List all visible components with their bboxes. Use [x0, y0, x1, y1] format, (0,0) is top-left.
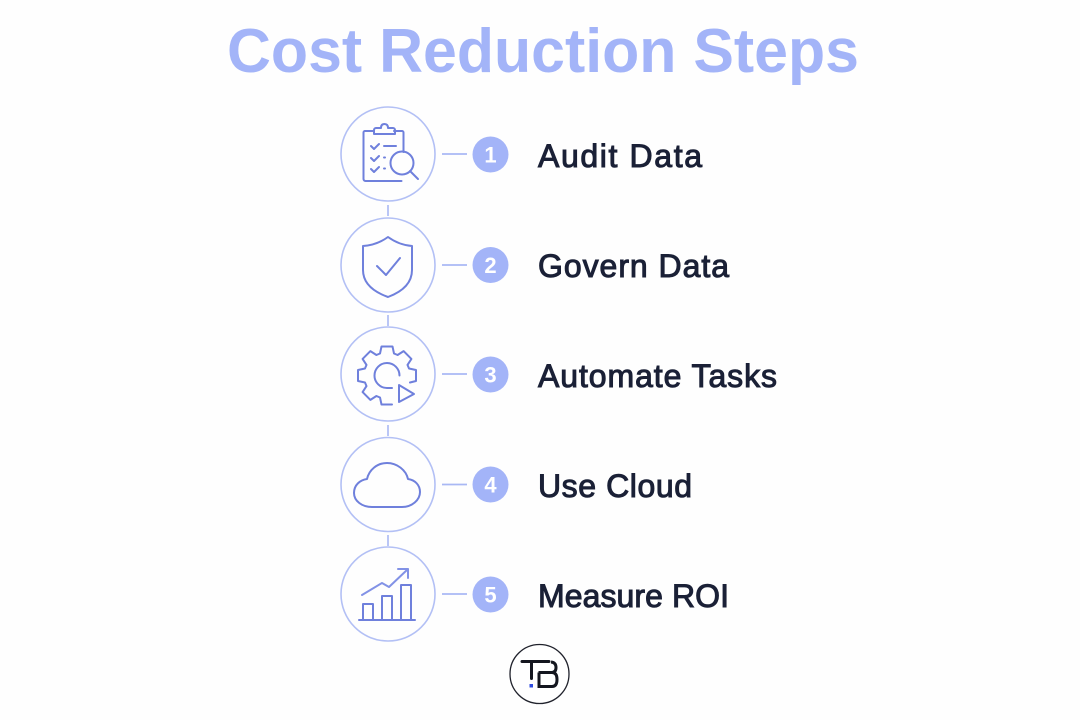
connector [442, 484, 467, 486]
connector [442, 593, 467, 595]
logo: TB [510, 644, 569, 704]
title: Cost Reduction Steps [227, 17, 859, 86]
number badge 4 [472, 466, 508, 502]
icon: clipboard with magnifier [341, 107, 435, 201]
step 4: use cloud [341, 438, 692, 532]
number badge 5: 5 [484, 582, 497, 608]
connector: 3 to 4 [387, 425, 389, 436]
number badge 2: 2 [484, 253, 497, 278]
number badge 4: 4 [484, 472, 497, 498]
label: Audit Data [538, 138, 702, 174]
label: Measure ROI [538, 578, 729, 614]
connector: 1 to 2 [387, 205, 389, 216]
connector: 2 to 3 [387, 315, 389, 326]
number badge 1: 1 [484, 142, 497, 168]
step 3: automate tasks [341, 327, 777, 421]
number badge 1 [472, 136, 508, 172]
icon: bar chart with arrow [341, 547, 435, 641]
icon: gear with play [341, 327, 435, 421]
connector [442, 153, 467, 155]
icon: cloud [341, 438, 435, 532]
number badge 2 [472, 247, 508, 283]
number badge 5 [472, 576, 508, 612]
label: Automate Tasks [538, 358, 777, 394]
step 1: audit data [341, 107, 702, 201]
connector [442, 373, 467, 375]
step 5: measure roi [341, 547, 729, 641]
icon: shield with check [341, 218, 435, 312]
connector: 4 to 5 [387, 535, 389, 546]
label: Use Cloud [538, 468, 692, 504]
number badge 3 [472, 356, 508, 392]
connector [442, 264, 467, 266]
number badge 3: 3 [484, 362, 497, 388]
step 2: govern data [341, 218, 729, 312]
label: Govern Data [538, 248, 729, 284]
